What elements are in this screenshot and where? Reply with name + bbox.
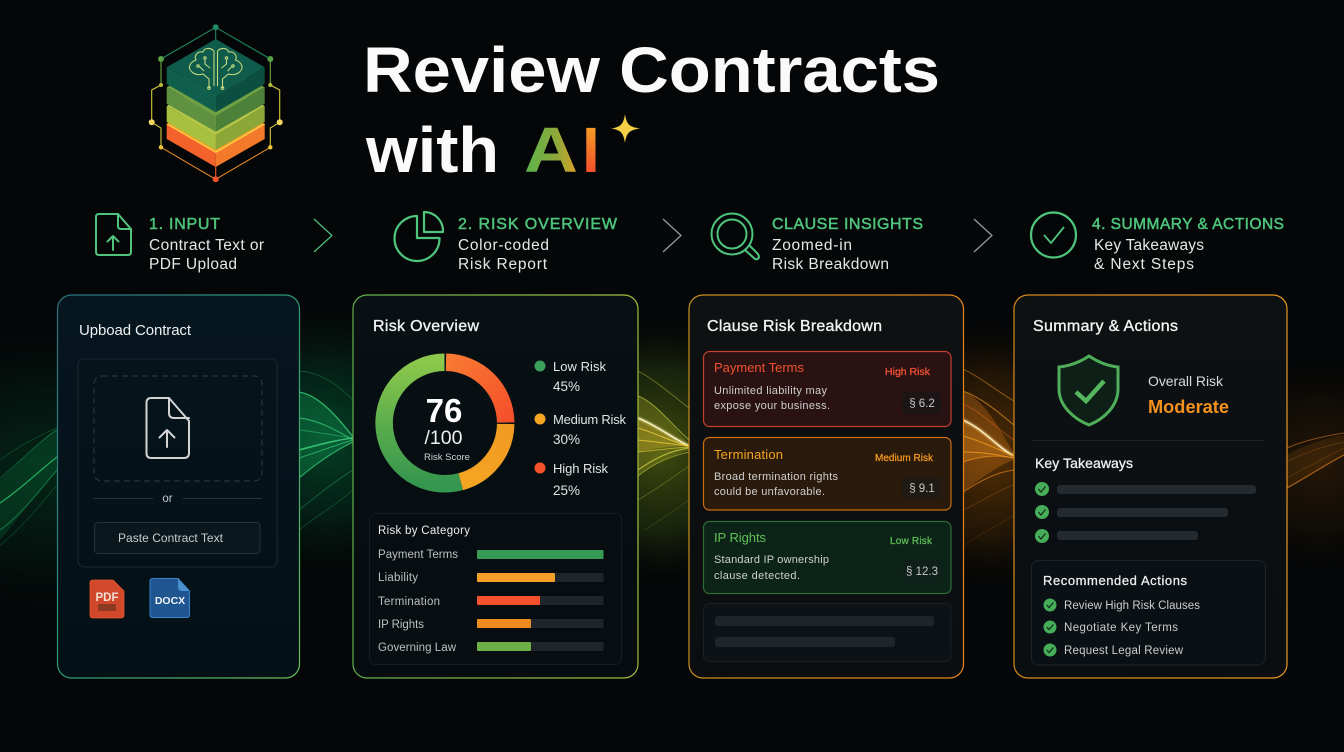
icon: document upload — [146, 398, 189, 458]
legend: Medium Risk — [553, 412, 626, 427]
legend: 30% — [553, 432, 580, 447]
bar chart: risk by category: Governing Law — [378, 642, 457, 654]
step 4: summary and actions — [1031, 212, 1284, 273]
clause card: payment terms — [704, 352, 951, 426]
heading: Risk Overview — [373, 318, 479, 335]
logo layer: green — [167, 59, 265, 132]
step 1: input: PDF Upload — [149, 256, 237, 273]
step 1: input: 1. INPUT — [149, 216, 220, 233]
panel: summary and actions — [1014, 295, 1287, 678]
donut chart: risk score: /100 — [425, 427, 463, 449]
step 1: input: Contract Text or — [149, 237, 264, 254]
icon: magnifier — [712, 214, 759, 259]
legend: Low Risk — [553, 359, 606, 374]
bar chart: risk by category: Risk by Category — [378, 525, 470, 537]
icon: PDF file: PDF — [96, 592, 118, 604]
recommended actions: Recommended Actions — [1043, 573, 1188, 588]
arrow 3 — [974, 219, 992, 252]
icon: check circle — [1031, 212, 1076, 258]
step 4: summary and actions: & Next Steps — [1094, 256, 1194, 273]
wave: left green — [0, 428, 57, 545]
legend: 25% — [553, 483, 580, 498]
clause card: termination: could be unfavorable. — [714, 486, 825, 498]
title: A — [524, 114, 578, 186]
overall risk — [1148, 373, 1229, 417]
step 2: risk overview: 2. RISK OVERVIEW — [458, 216, 618, 233]
clause card: IP rights: IP Rights — [714, 530, 766, 545]
step 4: summary and actions: 4. SUMMARY & ACTIONS — [1092, 216, 1284, 233]
step 1: input — [96, 214, 264, 273]
wave: yellow gap — [638, 371, 689, 530]
clause card: payment terms: High Risk — [885, 366, 931, 378]
icon: file upload — [96, 214, 131, 255]
logo layer: olive — [167, 78, 265, 150]
clause card: termination: § 9.1 — [909, 483, 935, 495]
step 2: risk overview: Color-coded — [458, 237, 549, 254]
clause card: IP rights: § 12.3 — [906, 566, 938, 578]
wave fills — [0, 391, 1344, 540]
clause card: IP rights: Standard IP ownership — [714, 554, 829, 566]
clause card: IP rights — [704, 522, 951, 594]
clause card: IP rights: Low Risk — [890, 536, 933, 547]
clause card: payment terms: § 6.2 — [909, 398, 935, 410]
logo circuit frame — [149, 24, 283, 182]
step 4: summary and actions: Key Takeaways — [1094, 237, 1204, 254]
wave: green gap — [299, 371, 353, 530]
legend: High Risk — [553, 461, 608, 476]
clause card: IP rights: clause detected. — [714, 570, 800, 582]
icon: shield check — [1059, 356, 1118, 425]
placeholder clause card — [704, 604, 951, 662]
panel: risk overview — [353, 295, 638, 678]
heading: Clause Risk Breakdown — [707, 318, 882, 335]
bar chart: risk by category — [370, 514, 622, 664]
wave: right orange — [1287, 433, 1344, 488]
panel: upload contract — [58, 295, 300, 678]
button: paste text — [94, 522, 260, 554]
key takeaways: Key Takeaways — [1035, 455, 1133, 471]
clause card: termination: Medium Risk — [875, 453, 934, 464]
recommended actions: Review High Risk Clauses — [1064, 600, 1200, 612]
icon: PDF file — [90, 580, 124, 618]
donut chart: risk score: Risk Score — [424, 452, 470, 463]
icon: sparkle — [611, 114, 640, 143]
bar chart: risk by category: Payment Terms — [378, 549, 458, 561]
icon: DOCX file: DOCX — [155, 595, 185, 607]
clause card: payment terms: Payment Terms — [714, 360, 804, 375]
icon: pie chart — [395, 212, 443, 261]
clause card: payment terms: Unlimited liability may — [714, 385, 828, 397]
heading: Upboad Contract — [79, 322, 192, 339]
bar chart: risk by category: Termination — [378, 596, 440, 608]
step 2: risk overview — [395, 212, 618, 273]
recommended actions: Negotiate Key Terms — [1064, 622, 1178, 634]
logo: layered AI brain stack — [149, 24, 283, 182]
bar chart: risk by category: Liability — [378, 572, 418, 584]
step 3: clause insights: CLAUSE INSIGHTS — [772, 216, 923, 233]
step 2: risk overview: Risk Report — [458, 256, 548, 273]
overall risk: Overall Risk — [1148, 373, 1224, 389]
button: paste text: Paste Contract Text — [118, 531, 224, 545]
donut chart: risk score: 76 — [426, 392, 462, 429]
icon: DOCX file — [150, 578, 190, 618]
clause card: termination — [704, 438, 951, 510]
title: I — [582, 114, 600, 186]
clause card: payment terms: expose your business. — [714, 400, 830, 412]
title: with — [365, 114, 499, 186]
recommended actions: Request Legal Review — [1064, 645, 1184, 657]
overall risk: Moderate — [1148, 397, 1229, 417]
heading: Summary & Actions — [1033, 318, 1178, 335]
upload area: or — [162, 493, 173, 505]
arrow 1 — [314, 219, 332, 252]
legend — [534, 359, 626, 498]
legend: 45% — [553, 379, 580, 394]
clause card: termination: Broad termination rights — [714, 471, 838, 483]
arrow 2 — [663, 219, 681, 252]
upload area — [78, 359, 277, 567]
donut chart: risk score — [384, 362, 506, 484]
logo layer: teal with brain — [167, 39, 265, 112]
flowing light waves — [0, 369, 1344, 545]
panel: clause risk breakdown — [689, 295, 964, 678]
step 3: clause insights — [712, 214, 923, 273]
recommended actions — [1032, 560, 1266, 665]
step 3: clause insights: Zoomed-in — [772, 237, 852, 254]
wave: orange gap — [963, 369, 1014, 545]
title: Review Contracts — [363, 34, 940, 106]
title — [363, 34, 940, 186]
bar chart: risk by category: IP Rights — [378, 619, 424, 631]
step 3: clause insights: Risk Breakdown — [772, 256, 889, 273]
clause card: termination: Termination — [714, 447, 783, 462]
key takeaways — [1035, 455, 1256, 543]
logo layer: orange — [167, 96, 265, 167]
